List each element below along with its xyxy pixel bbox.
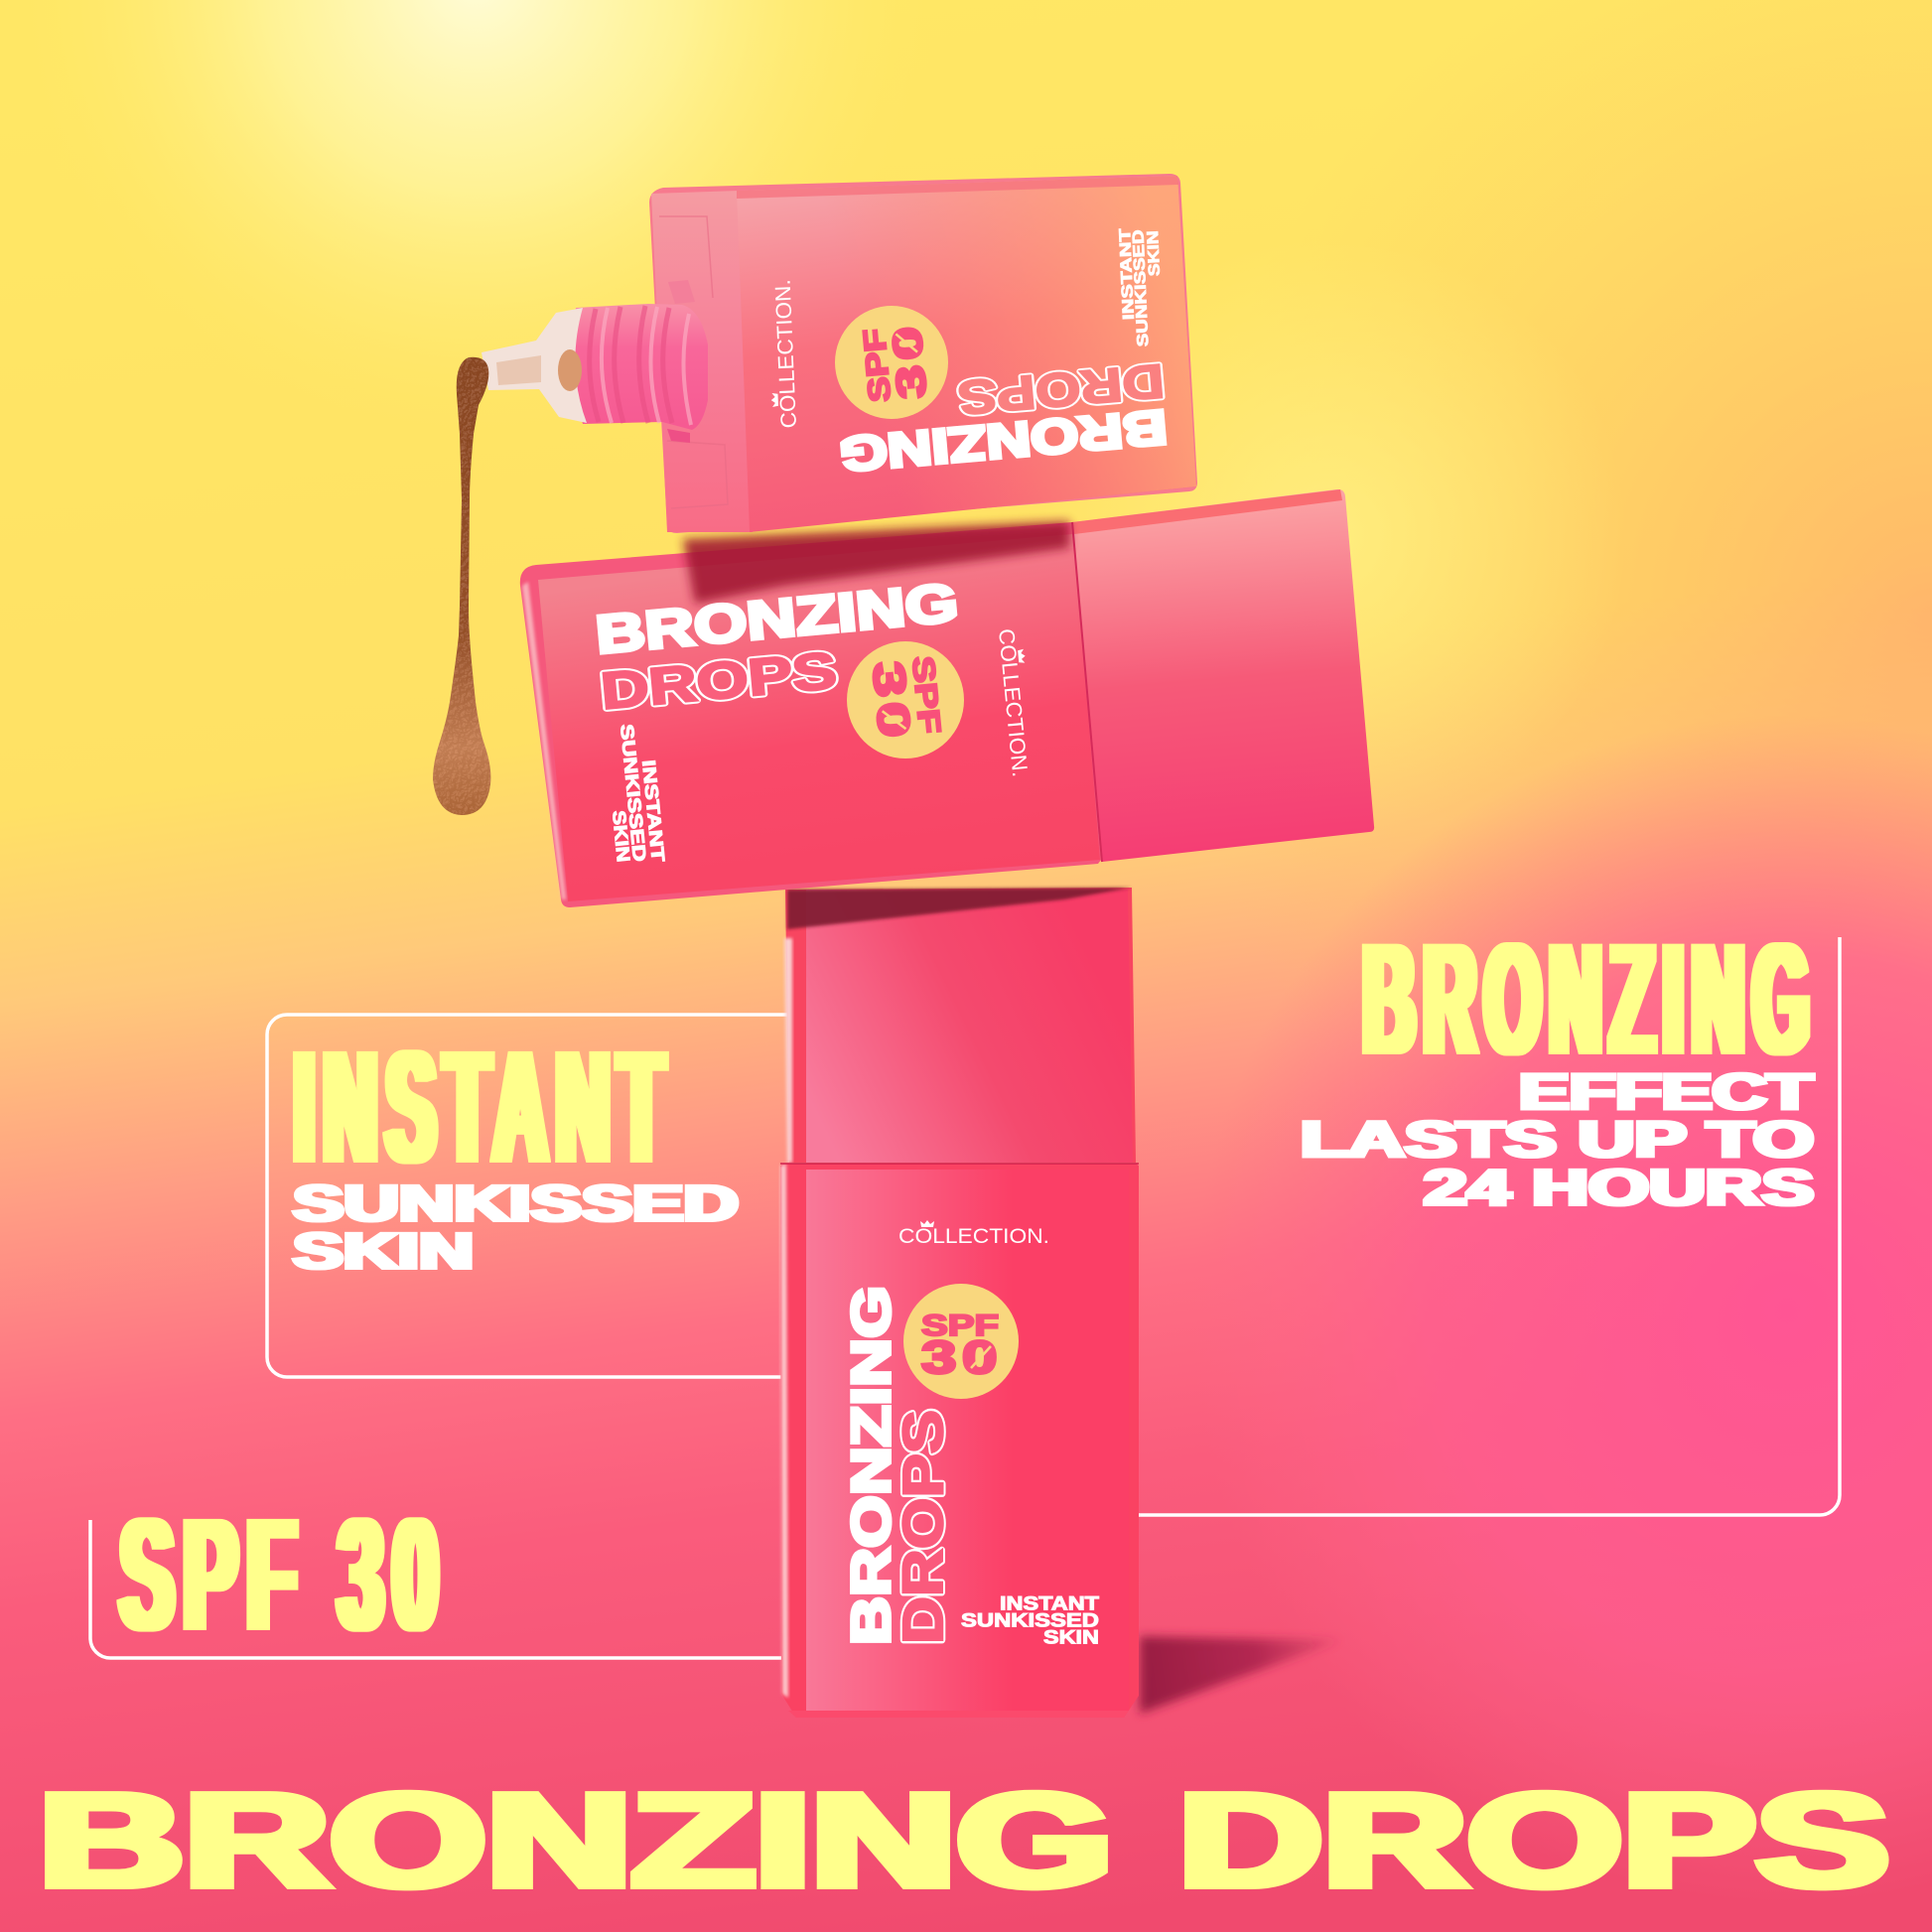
- text: sunkissed skin: SKIN: [293, 1223, 474, 1279]
- bottle: top tilted with open neck: [482, 174, 1197, 533]
- cap: [784, 888, 1136, 1163]
- bottle label: instant sunkissed skin: SUNKISSED: [961, 1610, 1099, 1632]
- bottle label: instant sunkissed skin: INSTANT: [1000, 1594, 1099, 1614]
- bottle label: collection: COLLECTION.: [769, 279, 801, 429]
- body: [649, 174, 1197, 533]
- badge: spf 30: [835, 306, 948, 419]
- panel: bronzing effect: [1132, 910, 1840, 1515]
- bottle label: instant sunkissed skin: SKIN: [1043, 1628, 1099, 1648]
- badge: spf 30: SPF: [921, 1310, 999, 1342]
- bottle label: instant sunkissed skin: INSTANT: [1117, 228, 1138, 321]
- nozzle: [482, 308, 587, 423]
- panel: spf 30: [90, 1485, 789, 1663]
- title: BRONZING: [39, 1765, 1113, 1915]
- badge: spf 30: [903, 1284, 1019, 1399]
- bottle label: drops: DROPS: [892, 1410, 955, 1644]
- neck: [572, 304, 708, 430]
- bottle label: drops: DROPS: [599, 642, 839, 721]
- bottle label: instant sunkissed skin: [961, 1594, 1099, 1648]
- bottle label: bronzing: BRONZING: [837, 399, 1170, 481]
- body: [520, 522, 1101, 907]
- text: effect lasts up to 24 hours: 24 HOURS: [1424, 1160, 1814, 1215]
- text: effect lasts up to 24 hours: LASTS UP TO: [1301, 1111, 1814, 1168]
- bottle label: drops: DROPS: [956, 353, 1167, 424]
- badge: spf 30: 30: [863, 659, 921, 746]
- bottle label: drops: DROPS: [892, 1410, 955, 1644]
- heading: spf 30: SPF 30: [120, 1485, 448, 1663]
- badge: spf 30: SPF: [905, 654, 947, 735]
- badge: spf 30: SPF: [857, 328, 897, 403]
- bottle label: instant sunkissed skin: SUNKISSED: [617, 723, 650, 863]
- bottle label: instant sunkissed skin: SUNKISSED: [1130, 229, 1152, 347]
- cast shadow: [683, 521, 1069, 604]
- badge: spf 30: [847, 641, 964, 759]
- badge: spf 30: 30: [921, 1331, 1003, 1383]
- bottle label: drops: DROPS: [956, 353, 1167, 424]
- bottle label: instant sunkissed skin: SKIN: [609, 809, 634, 863]
- tab: [668, 280, 695, 304]
- bottle label: drops: DROPS: [599, 642, 839, 721]
- panel: instant sunkissed skin: INSTANT: [294, 1018, 673, 1195]
- bottle label: bronzing: BRONZING: [594, 573, 961, 665]
- bottle label: bronzing: BRONZING: [840, 1286, 901, 1645]
- text: effect lasts up to 24 hours: [1301, 1063, 1814, 1215]
- bottle label: instant sunkissed skin: [609, 723, 669, 864]
- text: sunkissed skin: SUNKISSED: [293, 1175, 739, 1231]
- cap: [1072, 489, 1374, 862]
- bottle label: instant sunkissed skin: [1117, 228, 1164, 347]
- bottle label: instant sunkissed skin: INSTANT: [638, 759, 669, 864]
- text: effect lasts up to 24 hours: EFFECT: [1519, 1063, 1813, 1120]
- bronzer drip: [433, 357, 490, 815]
- bottle: middle tilted: [520, 489, 1374, 907]
- bottle label: instant sunkissed skin: SKIN: [1145, 230, 1164, 277]
- bottle label: collection: COLLECTION.: [898, 1225, 1049, 1248]
- title: [39, 1765, 1889, 1915]
- title: DROPS: [1178, 1765, 1889, 1915]
- body: [780, 1164, 1139, 1718]
- panel: instant sunkissed skin: [267, 1015, 789, 1377]
- bottle label: collection: COLLECTION.: [994, 627, 1033, 778]
- floor shadow: [1140, 1636, 1342, 1714]
- text: sunkissed skin: [293, 1175, 739, 1279]
- badge: spf 30: 30: [883, 320, 935, 400]
- bottle: bottom standing: [780, 888, 1139, 1718]
